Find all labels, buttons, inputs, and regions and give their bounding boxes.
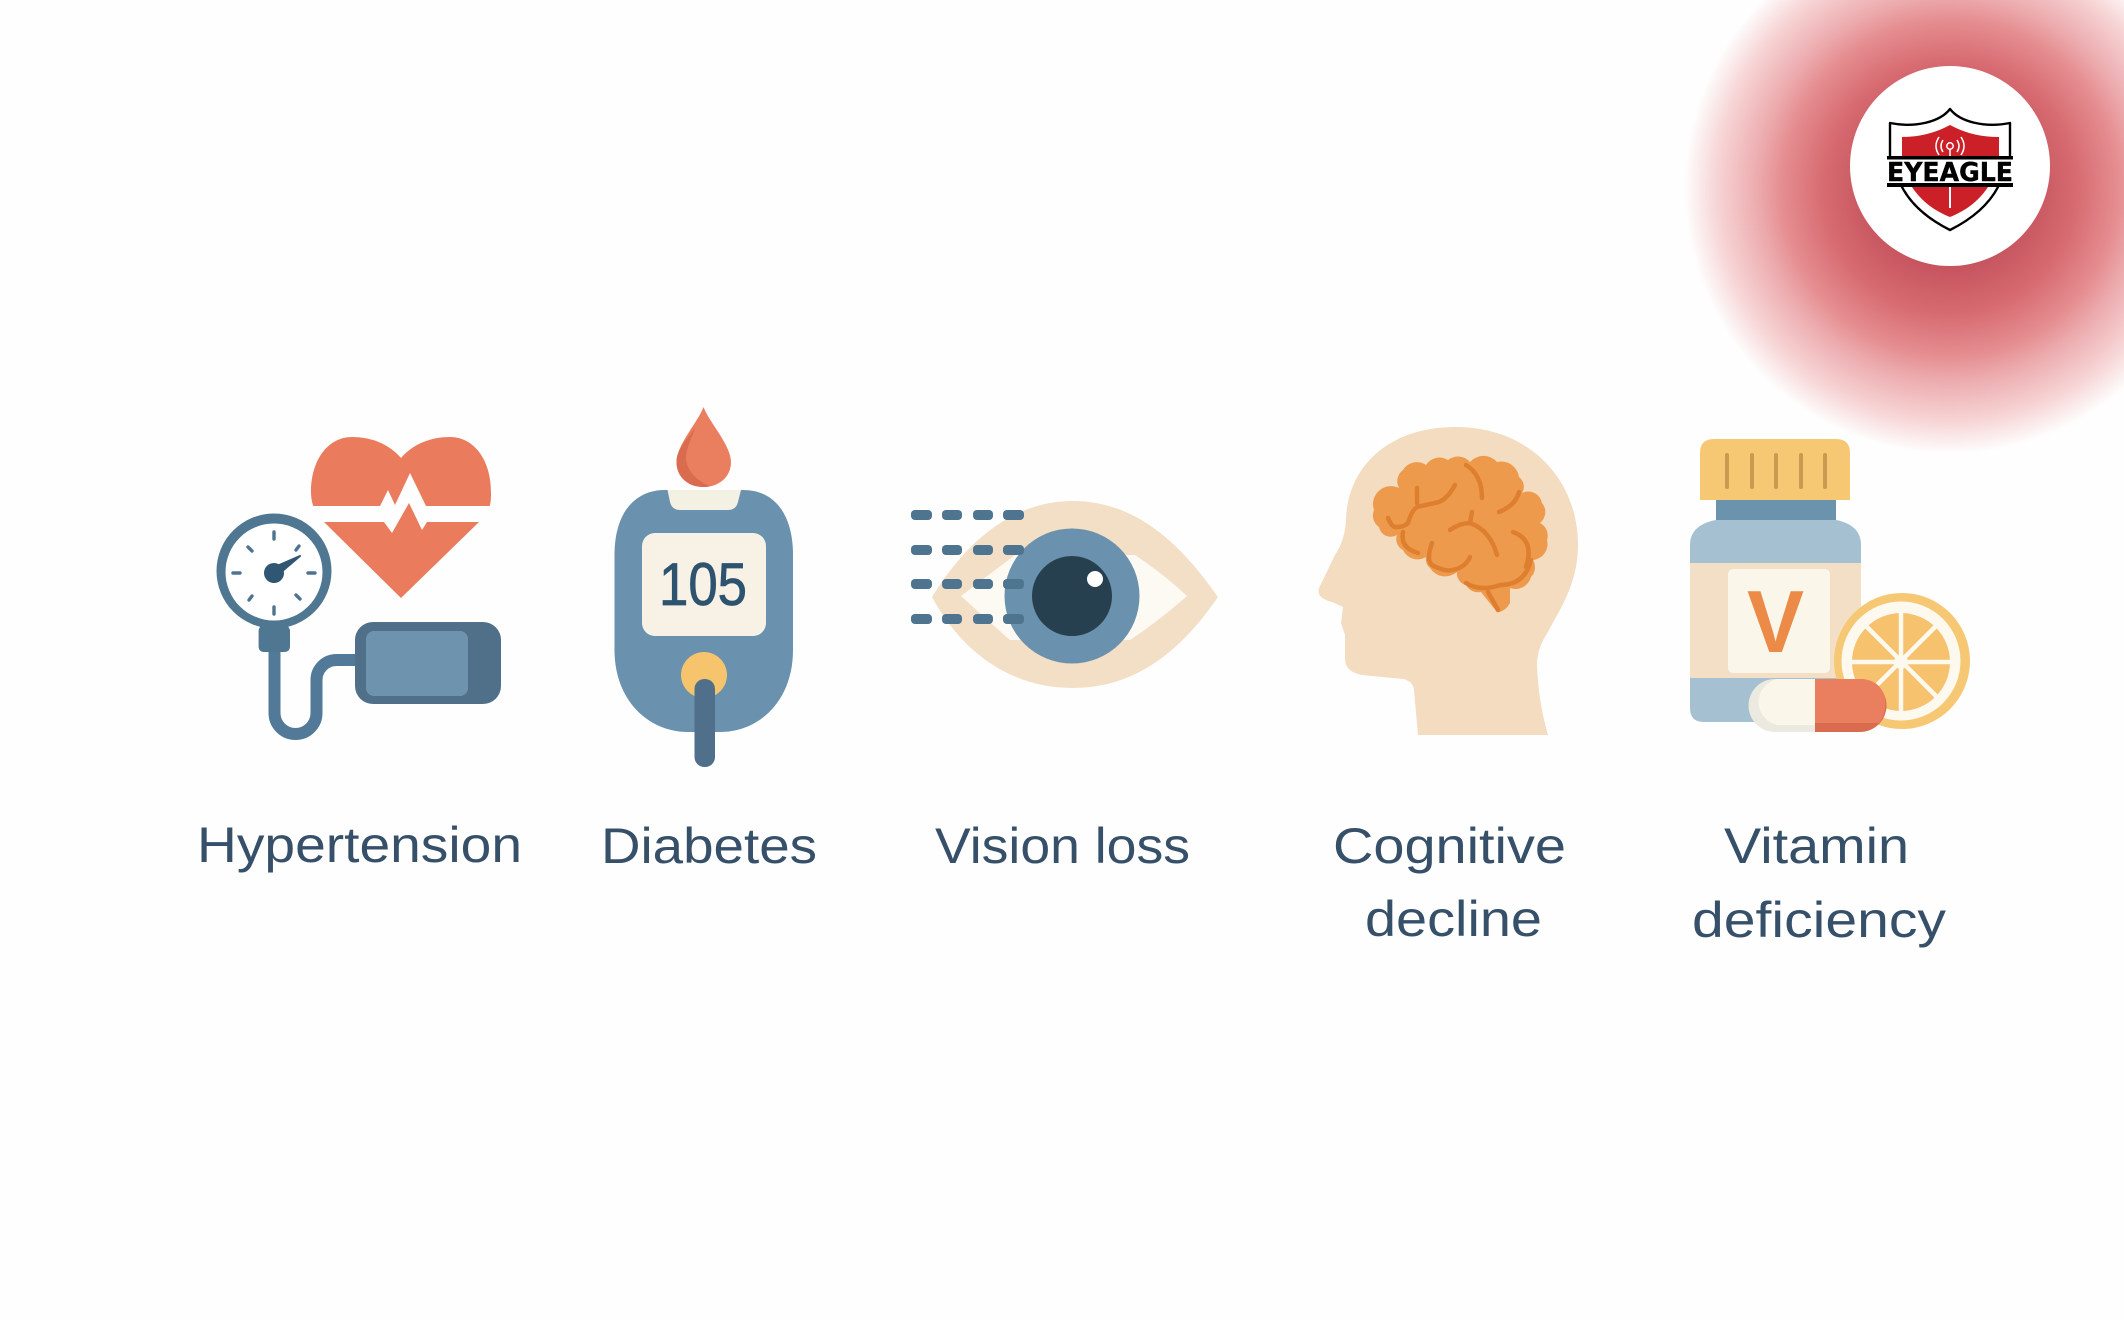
bottle body [1690, 520, 1861, 722]
bottle label band [1690, 563, 1861, 678]
logo badge: EYEAGLE [1887, 158, 2013, 188]
reading: 105 [659, 551, 747, 618]
lancet [694, 679, 715, 767]
label: Vitamin deficiency: deficiency [1692, 892, 1946, 948]
highlight [1087, 571, 1103, 587]
capsule [1748, 679, 1887, 732]
label: Cognitive decline: Cognitive [1333, 818, 1566, 874]
blur dashes [911, 510, 1024, 624]
logo badge [1850, 66, 2050, 266]
cuff [355, 622, 501, 704]
label: Cognitive decline: decline [1365, 891, 1542, 947]
heart [300, 437, 500, 598]
pupil [1032, 556, 1112, 636]
icon: vitamin bottle [1690, 439, 1970, 732]
cap [1700, 439, 1850, 500]
label: Vitamin deficiency: Vitamin [1724, 818, 1909, 874]
brain [1373, 456, 1548, 612]
icon: hypertension [216, 437, 501, 734]
gauge [216, 514, 332, 652]
icon: glucose meter [614, 407, 793, 767]
neck [1716, 500, 1836, 520]
label [1728, 569, 1830, 673]
head [1319, 427, 1578, 735]
orange slice [1834, 593, 1970, 729]
label: Hypertension: Hypertension [197, 817, 522, 873]
gauge tube [274, 648, 362, 734]
icon: eye vision loss [911, 501, 1218, 688]
blood drop [676, 407, 731, 487]
label: Cognitive decline [1333, 818, 1566, 947]
label: Vision loss: Vision loss [935, 818, 1190, 874]
label: Vitamin deficiency [1692, 818, 1946, 948]
port [681, 652, 727, 698]
red glow behind logo [1684, 0, 2124, 454]
icon: head with brain [1319, 427, 1578, 735]
screen [642, 533, 766, 636]
test strip [668, 490, 741, 510]
letter V: V [1747, 572, 1804, 671]
meter body [614, 490, 793, 732]
label: Diabetes: Diabetes [601, 818, 817, 874]
iris [1004, 528, 1140, 664]
